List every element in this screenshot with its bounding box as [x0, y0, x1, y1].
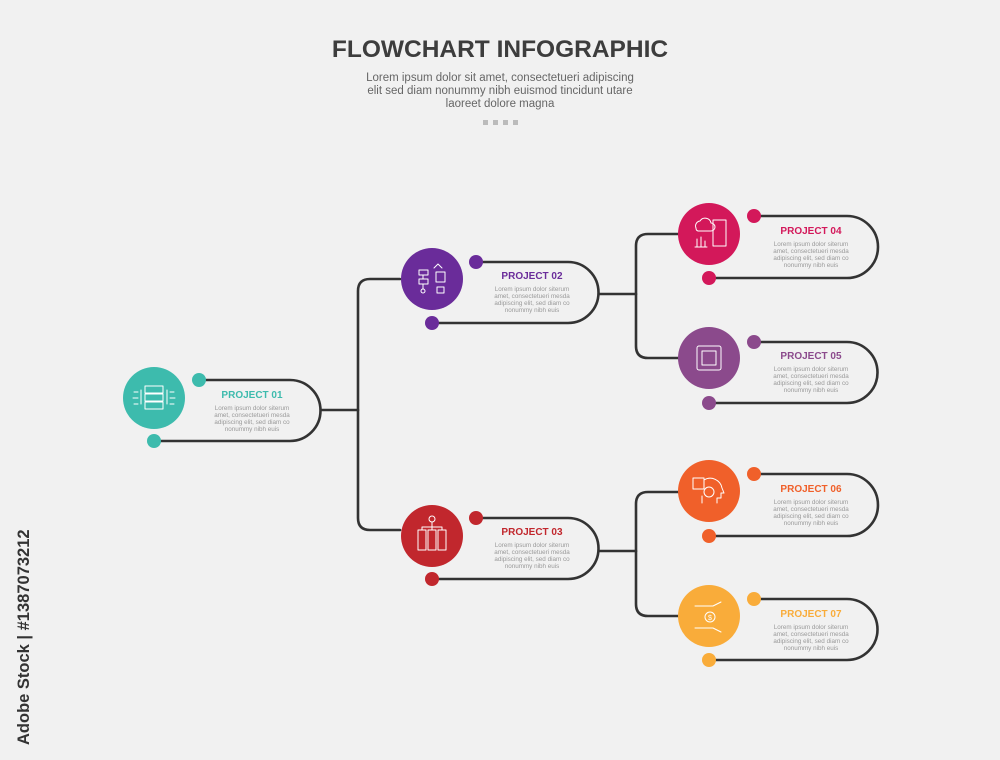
project 01: Lorem ipsum dolor siterum [215, 405, 289, 412]
project 07: Lorem ipsum dolor siterum [774, 624, 848, 631]
project 06: amet, consectetueri mesda [773, 506, 849, 513]
project 04: adipiscing elit, sed diam co [773, 255, 849, 262]
project 01: adipiscing elit, sed diam co [214, 419, 290, 426]
connectors [321, 234, 678, 616]
project 03: adipiscing elit, sed diam co [494, 556, 570, 563]
project 03: Lorem ipsum dolor siterum [495, 542, 569, 549]
icon: robot hand flow [419, 264, 445, 293]
project 02: amet, consectetueri mesda [494, 293, 570, 300]
icon: cloud phone [695, 218, 726, 247]
subtitle [366, 72, 634, 110]
project 02: nonummy nibh euis [505, 307, 559, 314]
icon: hands money: $ [708, 615, 712, 622]
decorative dots [483, 120, 518, 125]
project 04 [678, 203, 878, 285]
project 03: amet, consectetueri mesda [494, 549, 570, 556]
icon: head gear [693, 478, 724, 503]
subtitle: laoreet dolore magna [446, 98, 555, 110]
project 03: nonummy nibh euis [505, 563, 559, 570]
project 01: nonummy nibh euis [225, 426, 279, 433]
project 04: nonummy nibh euis [784, 262, 838, 269]
project 07 [678, 585, 877, 667]
project 02 [401, 248, 598, 330]
project 01: PROJECT 01 [221, 390, 283, 401]
project 03: PROJECT 03 [501, 527, 563, 538]
project 05 [678, 327, 877, 410]
project 05: Lorem ipsum dolor siterum [774, 366, 848, 373]
project 07: PROJECT 07 [780, 609, 842, 620]
icon: hands money [695, 602, 721, 632]
project 03 [401, 505, 598, 586]
watermark id: Adobe Stock | #1387073212 [15, 529, 33, 745]
project 02: Lorem ipsum dolor siterum [495, 286, 569, 293]
project 07: nonummy nibh euis [784, 645, 838, 652]
project 06 [678, 460, 878, 543]
project 05: PROJECT 05 [780, 351, 842, 362]
project 05: nonummy nibh euis [784, 387, 838, 394]
project 06: nonummy nibh euis [784, 520, 838, 527]
project 05: adipiscing elit, sed diam co [773, 380, 849, 387]
project 02: adipiscing elit, sed diam co [494, 300, 570, 307]
icon: hands together [697, 346, 721, 370]
subtitle: Lorem ipsum dolor sit amet, consectetueri adipiscing [366, 72, 634, 84]
icon: server [133, 386, 175, 409]
project 01 [123, 367, 320, 448]
project 06: Lorem ipsum dolor siterum [774, 499, 848, 506]
subtitle: elit sed diam nonummy nibh euismod tincidunt utare [367, 85, 633, 97]
project 06: adipiscing elit, sed diam co [773, 513, 849, 520]
project 05: amet, consectetueri mesda [773, 373, 849, 380]
project 04: Lorem ipsum dolor siterum [774, 241, 848, 248]
project 07: amet, consectetueri mesda [773, 631, 849, 638]
project 04: PROJECT 04 [780, 226, 842, 237]
title: FLOWCHART INFOGRAPHIC [332, 36, 668, 63]
project 02: PROJECT 02 [501, 271, 563, 282]
project 01: amet, consectetueri mesda [214, 412, 290, 419]
project 06: PROJECT 06 [780, 484, 842, 495]
project 07: adipiscing elit, sed diam co [773, 638, 849, 645]
icon: hierarchy lists [418, 516, 446, 550]
project 04: amet, consectetueri mesda [773, 248, 849, 255]
